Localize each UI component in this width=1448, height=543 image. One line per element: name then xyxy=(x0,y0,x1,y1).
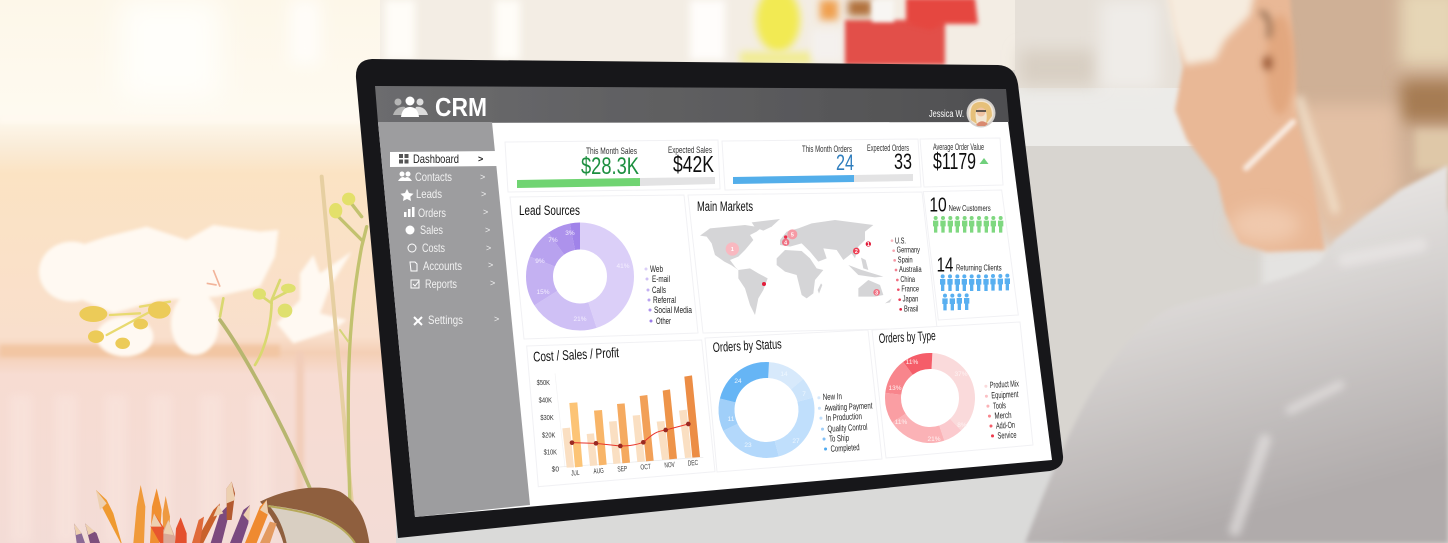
x axis labels: AUG xyxy=(593,466,604,476)
heading: orders by type: Orders by Type xyxy=(878,328,936,346)
donut chart: lead sources: 3% xyxy=(565,230,575,237)
active menu item: Dashboard: > xyxy=(478,154,483,164)
bar chart: cost sales profit xyxy=(537,373,703,478)
menu item: Contacts xyxy=(398,170,485,184)
legend: order status: To Ship xyxy=(829,433,849,444)
panel: monthly orders xyxy=(722,139,921,190)
legend: order status: Quality Control xyxy=(827,422,868,434)
legend: markets: France xyxy=(901,284,919,294)
icon rows: returning clients xyxy=(940,274,1010,310)
heading: main markets: Main Markets xyxy=(697,199,753,214)
donut chart: orders by type: 37% xyxy=(954,371,968,378)
legend: order status xyxy=(817,389,875,454)
menu item: Leads: > xyxy=(481,189,486,199)
panel: monthly sales: $42K xyxy=(673,151,715,177)
donut chart: lead sources: 9% xyxy=(535,258,545,265)
bars xyxy=(562,375,700,468)
legend: order type: Equipment xyxy=(991,389,1019,400)
donut chart: lead sources: 21% xyxy=(573,316,587,323)
woman face and neck xyxy=(1170,0,1325,252)
legend: order type: Merch xyxy=(994,410,1012,421)
sidebar menu xyxy=(378,122,530,517)
menu item: Sales: Sales xyxy=(420,223,443,237)
donut chart: orders by type: 11% xyxy=(895,419,907,426)
map markers: 5 xyxy=(791,232,794,238)
CRM logo text: CRM xyxy=(435,92,487,122)
map markers: 4 xyxy=(784,240,787,246)
panel: monthly orders: This Month Orders xyxy=(802,144,852,154)
menu item: Accounts xyxy=(410,259,493,273)
panel: monthly orders: 33 xyxy=(894,149,912,174)
menu item: Leads: Leads xyxy=(416,187,442,201)
background: yellow flowers and red vase xyxy=(740,0,978,65)
map markers: 3 xyxy=(875,290,878,296)
woman hair xyxy=(1240,0,1448,250)
panel: average order value: Average Order Value xyxy=(933,142,984,152)
panel: average order value xyxy=(920,138,1003,187)
x axis labels xyxy=(571,458,699,478)
map markers xyxy=(726,229,880,296)
icon: up arrow xyxy=(980,158,988,164)
shirt folds xyxy=(1235,245,1420,530)
legend: markets: Germany xyxy=(897,245,921,255)
panel: customers: 14 xyxy=(937,254,953,276)
panel: orders by type xyxy=(872,322,1033,458)
donut chart: orders by status: 11 xyxy=(728,416,735,423)
donut chart: lead sources: 15% xyxy=(536,289,550,296)
orchid petals xyxy=(39,225,352,357)
panel: monthly sales: Expected Sales xyxy=(668,145,712,155)
y axis labels: $40K xyxy=(539,395,552,404)
x axis labels: JUL xyxy=(571,468,580,478)
panel: monthly sales: This Month Sales xyxy=(586,146,637,156)
menu item: Costs xyxy=(408,241,491,255)
legend: order type: Tools xyxy=(993,400,1006,411)
progress bar: orders xyxy=(733,174,913,184)
legend: markets: Japan xyxy=(903,294,919,304)
woman ear xyxy=(1260,12,1294,115)
donut chart: lead sources: 41% xyxy=(616,263,630,270)
menu item: Settings: Settings xyxy=(428,313,463,327)
legend: lead sources xyxy=(644,264,692,326)
active menu item: Dashboard: Dashboard xyxy=(413,152,459,166)
donut chart: orders by status: 27 xyxy=(792,438,800,445)
menu item: Orders: > xyxy=(483,207,488,217)
orchid plant xyxy=(39,177,369,543)
legend: markets xyxy=(891,235,922,313)
user name: Jessica W. xyxy=(929,109,964,120)
donut chart: orders by status: 7 xyxy=(802,391,806,398)
panel: customers: New Customers xyxy=(949,204,991,213)
legend: markets: Australia xyxy=(899,264,922,274)
menu item: Contacts: > xyxy=(480,172,485,182)
legend: order type: Service xyxy=(997,430,1017,441)
map markers: 1 xyxy=(867,242,870,248)
y axis labels: $10K xyxy=(544,448,557,457)
menu item: Sales: > xyxy=(485,225,490,235)
y axis labels: $30K xyxy=(540,413,554,422)
donut chart: orders by status xyxy=(724,368,809,452)
panel: orders by status xyxy=(705,330,882,472)
legend: order type xyxy=(984,378,1022,441)
progress bar: sales xyxy=(517,177,715,188)
icon: CRM people xyxy=(393,96,428,117)
y axis labels: $50K xyxy=(537,378,550,387)
heading: orders by status: Orders by Status xyxy=(712,336,782,355)
menu item: Orders xyxy=(404,206,488,220)
legend: markets: Spain xyxy=(898,255,913,265)
map markers: 1 xyxy=(731,247,734,253)
legend: lead sources: Other xyxy=(656,316,671,326)
legend: order type: Product Mix xyxy=(990,378,1019,390)
panel: lead sources xyxy=(510,195,698,339)
dashboard screen xyxy=(375,86,1052,517)
donut chart: orders by type xyxy=(888,359,969,443)
screen white pane xyxy=(378,121,1052,517)
menu item: Accounts: Accounts xyxy=(423,259,462,273)
plant pot xyxy=(260,488,369,543)
menu item: Reports xyxy=(411,277,495,291)
y axis labels: $0 xyxy=(552,465,559,474)
x axis labels: NOV xyxy=(664,460,675,470)
menu item: Contacts: Contacts xyxy=(415,170,452,184)
legend: order status: In Production xyxy=(826,411,862,423)
legend: order status: Awaiting Payment xyxy=(824,400,873,413)
woman: skin, hair, shirt xyxy=(1025,0,1448,543)
donut chart: orders by status: 14 xyxy=(780,371,788,378)
panel: monthly orders: Expected Orders xyxy=(867,143,909,153)
legend: markets: China xyxy=(900,274,915,284)
panel: monthly sales xyxy=(505,140,720,192)
menu item: Accounts: > xyxy=(488,260,493,270)
menu item: Settings: > xyxy=(494,314,499,324)
donut chart: orders by type: 8% xyxy=(957,422,967,429)
heading: cost sales profit: Cost / Sales / Profit xyxy=(533,344,619,365)
colored pencils xyxy=(74,482,277,543)
menu item: Orders: Orders xyxy=(418,206,446,220)
legend: markets: Brasil xyxy=(904,303,918,313)
top bar xyxy=(375,86,1009,128)
world map xyxy=(700,219,892,315)
menu item: Costs: Costs xyxy=(422,241,445,255)
panel: monthly orders: 24 xyxy=(836,150,854,175)
legend: lead sources: Calls xyxy=(652,285,666,295)
legend: lead sources: Web xyxy=(650,264,663,274)
map markers: 2 xyxy=(855,249,858,255)
menu item: Settings xyxy=(414,313,499,327)
woman neck highlights xyxy=(1300,100,1335,210)
active menu item: Dashboard xyxy=(390,151,499,167)
x axis labels: OCT xyxy=(640,462,651,472)
legend: order status: New In xyxy=(823,391,842,402)
legend: order type: Add-On xyxy=(996,420,1015,431)
legend: order status: Completed xyxy=(830,442,860,454)
x axis labels: SEP xyxy=(617,464,628,474)
donut chart: orders by status: 24 xyxy=(734,378,742,385)
icon row: new customers xyxy=(933,216,1003,233)
monitor bezel xyxy=(356,59,1063,538)
donut chart: orders by type: 21% xyxy=(927,436,941,443)
panel: main markets xyxy=(688,192,937,333)
donut chart: orders by status: 23 xyxy=(744,442,752,449)
orchid stems xyxy=(107,177,367,537)
donut chart: lead sources xyxy=(535,230,630,323)
panel: customers: 10 xyxy=(929,195,947,217)
profit line xyxy=(570,422,691,448)
orchid buds xyxy=(79,193,355,349)
legend: lead sources: E-mail xyxy=(652,274,670,284)
x axis labels: DEC xyxy=(687,458,699,468)
y axis labels: $20K xyxy=(542,430,555,439)
menu item: Costs: > xyxy=(486,243,491,253)
menu item: Reports: Reports xyxy=(425,277,457,291)
menu item: Reports: > xyxy=(490,278,495,288)
legend: lead sources: Referral xyxy=(653,295,676,305)
heading: lead sources: Lead Sources xyxy=(519,203,580,218)
woman temple hair xyxy=(1165,0,1255,65)
menu item: Leads xyxy=(400,187,486,201)
user avatar xyxy=(966,98,996,128)
menu item: Sales xyxy=(406,223,490,237)
legend: markets: U.S. xyxy=(895,235,906,245)
donut chart: lead sources: 7% xyxy=(548,237,558,244)
woman neck shading xyxy=(1230,207,1300,243)
panel: average order value: $1179 xyxy=(933,148,976,174)
panel: customers: Returning Clients xyxy=(956,263,1002,272)
donut chart: orders by type: 11% xyxy=(906,359,918,366)
donut chart: orders by type: 13% xyxy=(888,385,902,392)
panel: monthly sales: $28.3K xyxy=(581,153,639,180)
panel: cost sales profit xyxy=(527,340,715,487)
panel: customers xyxy=(923,190,1018,320)
woman shirt xyxy=(1025,165,1448,543)
woman hair strand xyxy=(1246,122,1293,168)
y axis labels xyxy=(537,378,559,474)
legend: lead sources: Social Media xyxy=(654,305,692,315)
